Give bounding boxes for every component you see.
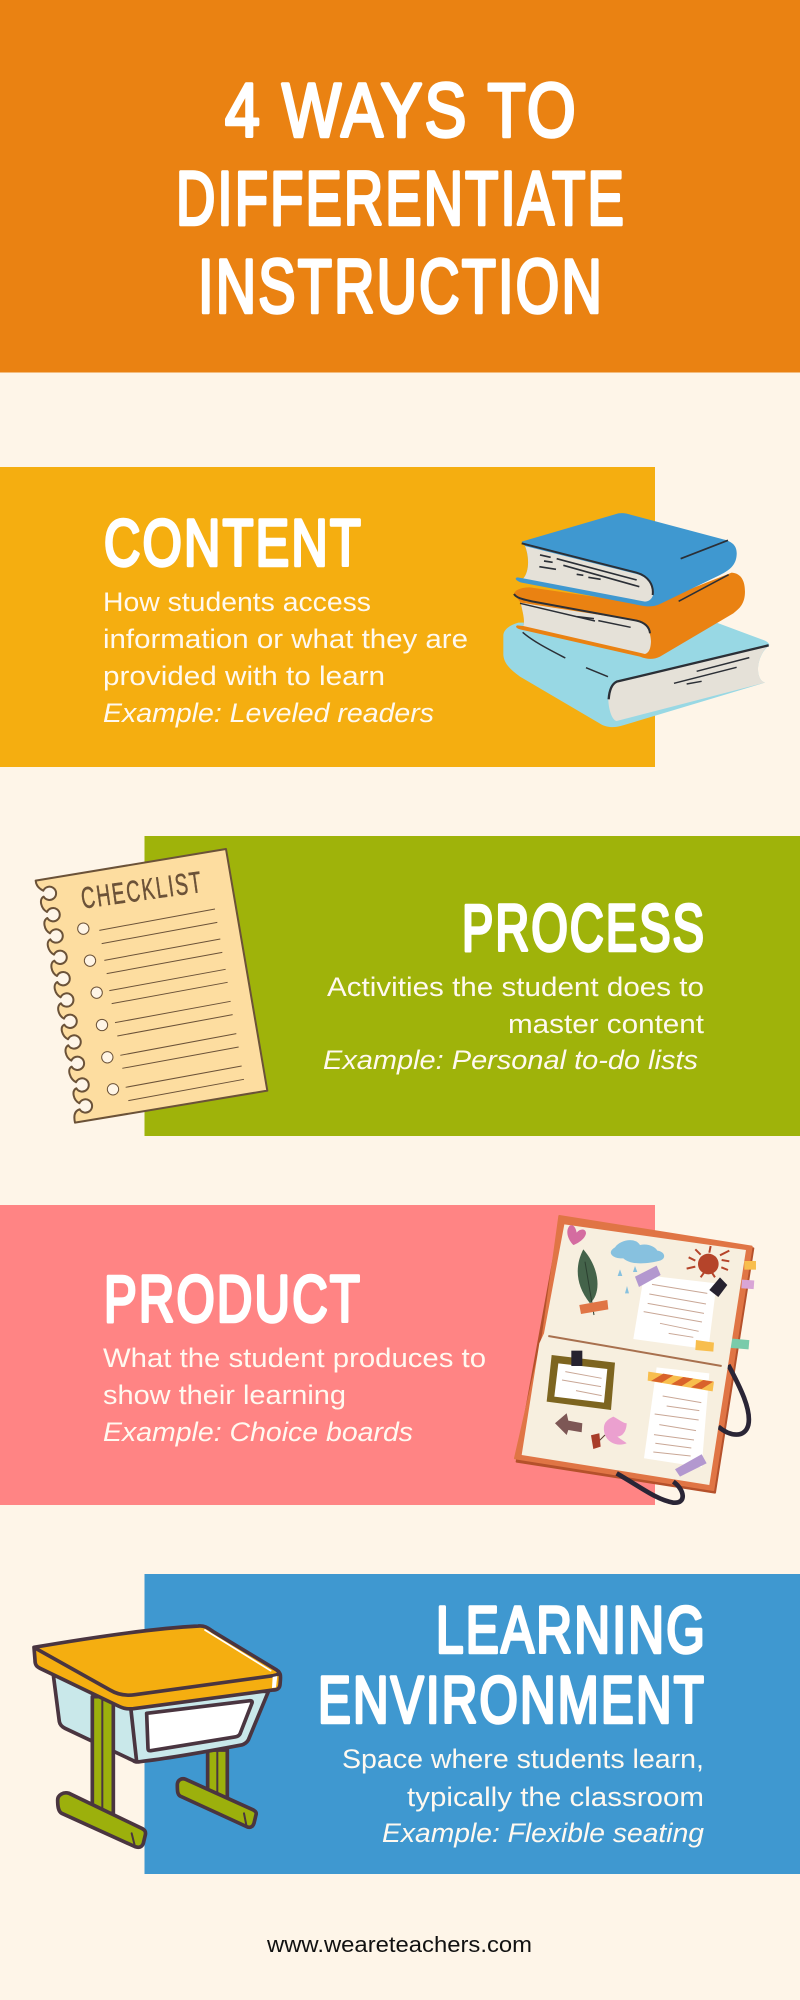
- icon: school desk: [34, 1626, 281, 1847]
- heading: learning environment: [318, 1592, 707, 1736]
- text block: learning environment description: [342, 1744, 704, 1848]
- photo frame: [547, 1351, 615, 1410]
- heart sticker: [567, 1225, 586, 1245]
- middle orange book: [514, 573, 745, 659]
- title: [176, 68, 626, 329]
- rear leg and foot: [177, 1750, 256, 1827]
- notebook cover: [515, 1216, 753, 1493]
- text block: process description: Example: Personal to-do lists: [323, 1045, 698, 1075]
- text block: learning environment description: Example: Flexible seating: [382, 1818, 704, 1848]
- panel: content: [0, 467, 655, 767]
- desk storage box: [53, 1675, 268, 1762]
- icon: stack of books: [503, 513, 769, 727]
- panel: product: [0, 1205, 655, 1505]
- checklist heading: CHECKLIST: [79, 866, 205, 916]
- arrow sticker: [555, 1413, 582, 1435]
- heading: learning environment: LEARNING: [436, 1592, 707, 1666]
- title: DIFFERENTIATE: [176, 156, 626, 241]
- text block: process description: Activities the student does to: [327, 972, 704, 1002]
- heading: product: PRODUCT: [104, 1261, 362, 1335]
- header band: [0, 0, 800, 372]
- icon: open notebook: [515, 1216, 756, 1503]
- icon: checklist note: [36, 849, 267, 1123]
- text block: product description: show their learning: [103, 1380, 346, 1410]
- title: INSTRUCTION: [198, 244, 604, 329]
- text block: content description: How students access: [103, 587, 371, 617]
- text block: process description: [323, 972, 705, 1075]
- text block: content description: information or what they are: [103, 624, 468, 654]
- leaf sticker: [578, 1249, 608, 1315]
- center crease: [548, 1336, 722, 1366]
- text block: product description: [103, 1343, 486, 1447]
- text block: product description: Example: Choice boards: [103, 1417, 413, 1447]
- page tabs: [730, 1261, 756, 1349]
- notebook straps: [617, 1365, 749, 1503]
- title: 4 WAYS TO: [225, 68, 578, 153]
- text block: product description: What the student produces to: [103, 1343, 486, 1373]
- front leg and foot: [58, 1697, 146, 1847]
- text block: process description: master content: [508, 1009, 705, 1039]
- text block: learning environment description: Space where students learn,: [342, 1744, 704, 1774]
- text block: content description: Example: Leveled readers: [103, 698, 434, 728]
- checklist rules: [99, 909, 244, 1101]
- text block: learning environment description: typically the classroom: [407, 1782, 704, 1812]
- cloud and rain: [611, 1240, 664, 1293]
- notebook pages: [522, 1224, 746, 1485]
- text block: content description: provided with to learn: [103, 661, 385, 691]
- checkbox circles: [78, 923, 119, 1095]
- text block: content description: [103, 587, 468, 728]
- upper note: [633, 1266, 727, 1352]
- panel: process: [144, 836, 800, 1136]
- panel: learning environment: [144, 1574, 800, 1874]
- sun sticker: [687, 1246, 729, 1277]
- footer website: www.weareteachers.com: [266, 1932, 532, 1957]
- lower note: [644, 1367, 714, 1477]
- desk top: [34, 1626, 281, 1709]
- top blue book: [516, 513, 737, 606]
- paper sheet: [36, 849, 267, 1123]
- heading: process: PROCESS: [462, 890, 706, 964]
- bottom light blue book: [503, 623, 769, 727]
- heading: content: CONTENT: [104, 505, 363, 579]
- flower sticker: [591, 1417, 627, 1449]
